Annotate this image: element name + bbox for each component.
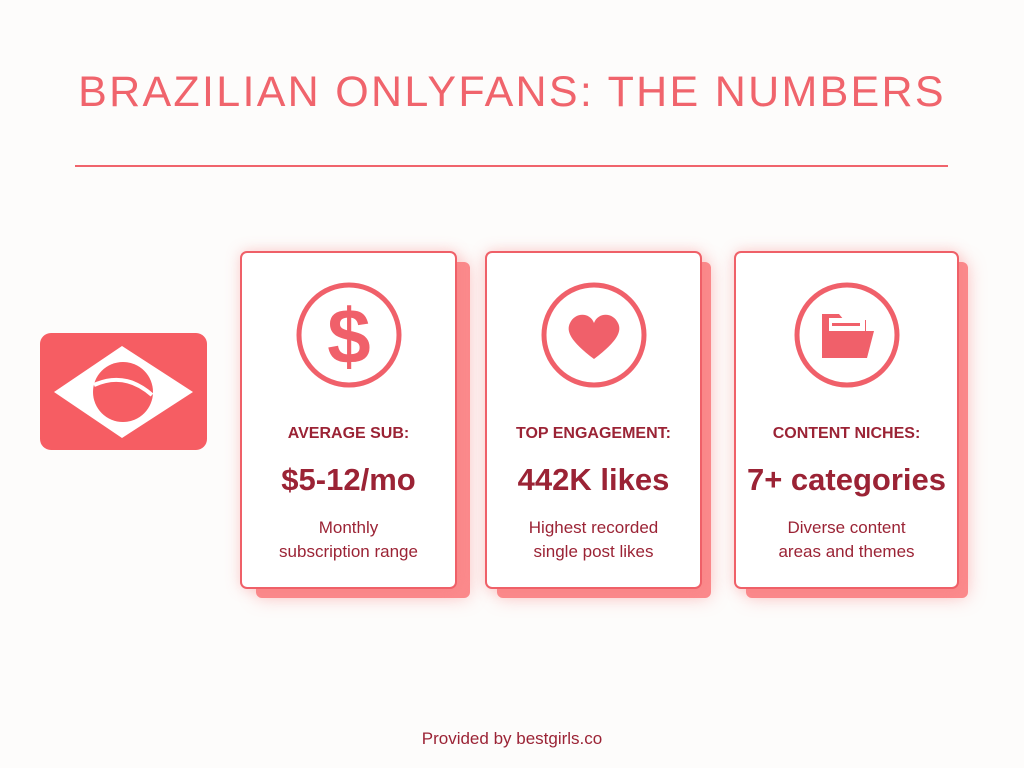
value: 7+ categories <box>747 462 946 497</box>
icon: heart <box>542 282 646 388</box>
label: AVERAGE SUB: <box>288 425 409 442</box>
description: single post likes <box>533 542 654 561</box>
icon: dollar <box>296 282 402 388</box>
icon: brazil flag <box>40 333 207 450</box>
title: BRAZILIAN ONLYFANS: THE NUMBERS <box>78 68 946 116</box>
description <box>279 518 418 561</box>
label: CONTENT NICHES: <box>773 425 920 442</box>
panel: content niches <box>734 251 959 589</box>
value: 442K likes <box>518 462 669 497</box>
footer: Provided by bestgirls.co <box>422 729 602 748</box>
description: subscription range <box>279 542 418 561</box>
icon: dollar: $ <box>327 292 370 380</box>
description: areas and themes <box>778 542 915 561</box>
value: $5-12/mo <box>281 462 416 497</box>
panel: average sub <box>240 251 457 589</box>
label: TOP ENGAGEMENT: <box>516 425 671 442</box>
icon: folder <box>794 282 900 388</box>
description: Diverse content <box>787 518 906 537</box>
description <box>778 518 915 561</box>
card shadows <box>256 262 470 598</box>
description: Monthly <box>319 518 378 537</box>
panel: top engagement <box>485 251 702 589</box>
description <box>529 518 658 561</box>
description: Highest recorded <box>529 518 658 537</box>
